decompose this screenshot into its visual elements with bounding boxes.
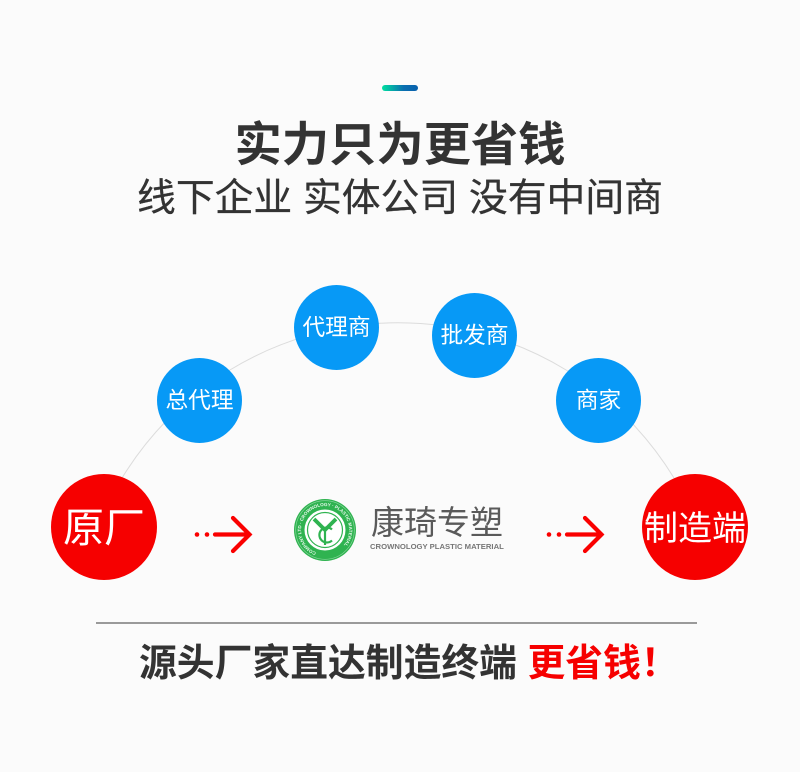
node: 商家: 商家 xyxy=(576,386,621,412)
node: 总代理 xyxy=(157,358,242,443)
logo xyxy=(294,499,504,561)
divider xyxy=(96,622,697,624)
logo name: 康琦专塑 xyxy=(371,504,503,541)
title: 实力只为更省钱 xyxy=(234,119,566,172)
node: 商家 xyxy=(556,358,641,443)
accent bar xyxy=(382,85,418,91)
arrow: right xyxy=(546,516,604,554)
node: 代理商 xyxy=(294,285,379,370)
arrow: left xyxy=(194,516,252,554)
subtitle: 线下企业 实体公司 没有中间商 xyxy=(137,177,663,220)
node: 原厂 xyxy=(51,474,157,580)
node: 总代理: 总代理 xyxy=(165,386,234,412)
node: 批发商 xyxy=(432,293,517,378)
node: 批发商: 批发商 xyxy=(440,322,509,348)
node: 原厂: 原厂 xyxy=(63,505,145,551)
node: 代理商: 代理商 xyxy=(302,314,371,340)
icon: logo emblem: COMPANY LTD · CROWNOLOGY · PLASTIC MATERIAL xyxy=(298,502,352,555)
logo tagline: CROWNOLOGY PLASTIC MATERIAL xyxy=(370,542,504,551)
node: 制造端: 制造端 xyxy=(644,510,746,548)
bottom slogan: 源头厂家直达制造终端 更省钱！ xyxy=(139,643,679,685)
node: 制造端 xyxy=(642,474,748,580)
